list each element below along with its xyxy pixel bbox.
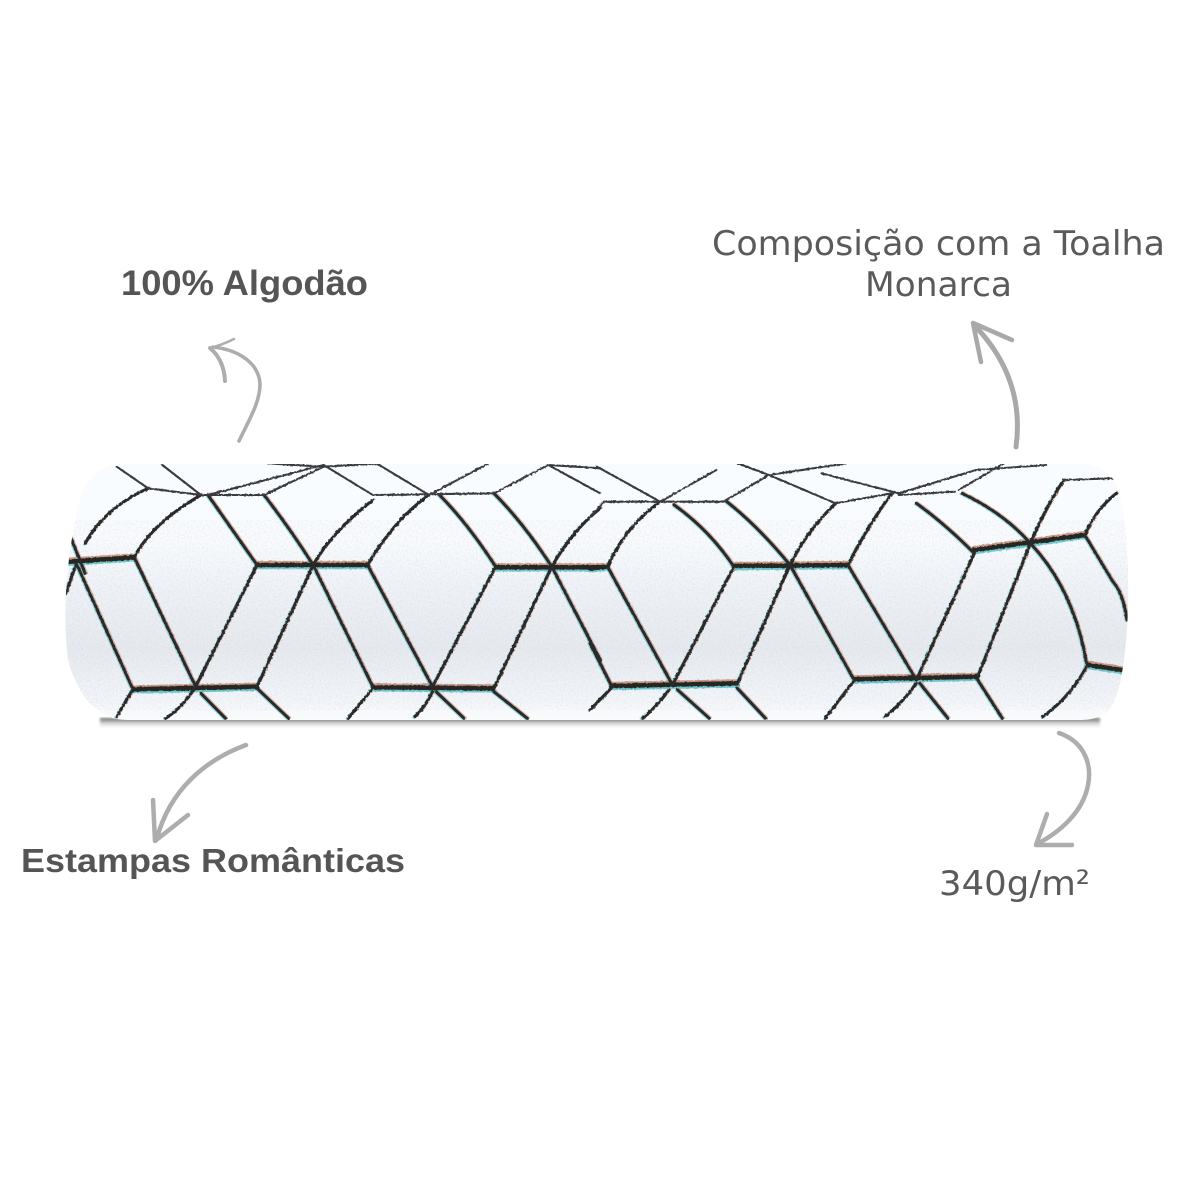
towel roll xyxy=(60,463,1135,728)
geometric hexagon print xyxy=(60,463,1135,719)
arrow: to Estampas xyxy=(153,745,246,841)
label: 340g/m²: 340g/m² xyxy=(939,864,1090,904)
towel body xyxy=(65,464,1128,720)
arrow: to Composição xyxy=(973,323,1017,447)
label: Composição com a Toalha Monarca: Composição com a Toalha xyxy=(712,224,1165,264)
arrow: to 100% Algodão xyxy=(210,339,260,441)
label: 100% Algodão: 100% Algodão xyxy=(121,264,368,303)
label: Composição com a Toalha Monarca: Monarca xyxy=(865,265,1012,305)
label: Estampas Românticas: Estampas Românticas xyxy=(21,842,405,879)
label: Composição com a Toalha Monarca xyxy=(712,224,1165,305)
arrow: to 340g/m² xyxy=(1036,733,1089,845)
towel contact shadow xyxy=(100,718,1100,728)
